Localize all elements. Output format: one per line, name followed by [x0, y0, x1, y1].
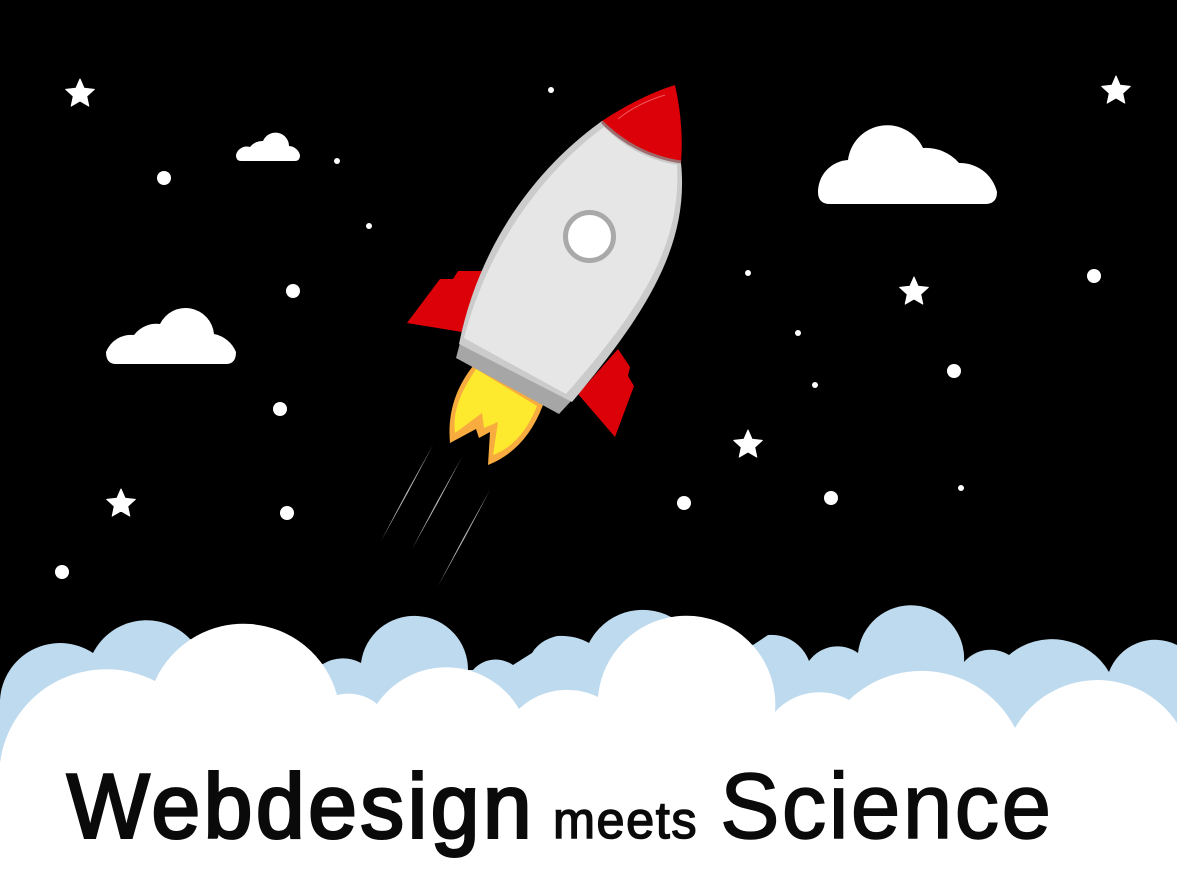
cloud: top right: [818, 125, 997, 204]
stars: [66, 76, 1130, 516]
rocket base band: [456, 343, 572, 414]
rocket window: [566, 212, 614, 260]
rocket: [407, 85, 682, 465]
rocket body face: [464, 127, 677, 394]
nose highlight: [618, 95, 665, 119]
right fin: [578, 349, 634, 437]
speed lines: [381, 445, 490, 586]
round star dots: [55, 87, 1101, 579]
title word: meets: meets: [553, 791, 697, 849]
white cloud layer: [0, 616, 1177, 875]
rocket flame inner: [454, 369, 537, 455]
rocket body edge: [459, 121, 682, 402]
rocket flame outer: [450, 366, 543, 465]
cloud: top left small: [236, 133, 300, 161]
blue cloud layer: [0, 605, 1177, 875]
nose cone seam: [602, 122, 681, 162]
title: [67, 754, 1051, 858]
rocket nose cone: [602, 85, 682, 163]
cloud: left middle: [106, 308, 236, 364]
title word: Webdesign: Webdesign: [67, 755, 532, 857]
title word: Science: Science: [720, 754, 1051, 858]
small white clouds: [106, 125, 997, 364]
left fin: [407, 271, 482, 332]
